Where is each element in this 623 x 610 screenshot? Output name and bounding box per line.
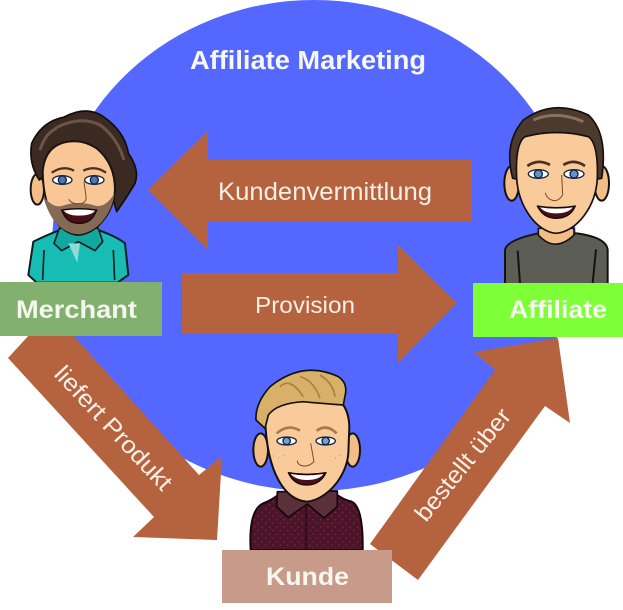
nose bbox=[69, 182, 86, 204]
face bbox=[516, 132, 597, 233]
label: Merchant bbox=[0, 282, 162, 336]
mouth bbox=[62, 209, 97, 223]
arrow: bestellt über: bestellt über bbox=[410, 403, 517, 527]
collar bbox=[54, 228, 103, 251]
beard bbox=[43, 193, 114, 234]
hair back bbox=[31, 111, 136, 212]
eyes bbox=[53, 176, 104, 184]
ears bbox=[504, 166, 609, 201]
mouth bbox=[288, 473, 326, 485]
mouth bbox=[537, 206, 575, 218]
title: Affiliate Marketing bbox=[190, 47, 426, 75]
label: Kunde: Kunde bbox=[266, 563, 349, 591]
arrow: Provision: Provision bbox=[255, 292, 355, 318]
collar bbox=[277, 491, 337, 518]
nose bbox=[545, 175, 563, 201]
freckles bbox=[273, 455, 340, 458]
ears bbox=[253, 433, 360, 467]
label: Affiliate: Affiliate bbox=[509, 296, 607, 324]
arrow: Provision bbox=[182, 245, 457, 363]
arrow: liefert Produkt: liefert Produkt bbox=[49, 361, 178, 496]
label: Affiliate bbox=[473, 283, 623, 337]
eyes bbox=[277, 437, 335, 445]
hair bbox=[510, 108, 603, 187]
arrow: bestellt über bbox=[370, 338, 570, 580]
eyebrows bbox=[527, 162, 585, 166]
nose bbox=[297, 443, 314, 466]
eyebrows bbox=[52, 168, 106, 173]
hair highlights bbox=[40, 121, 124, 160]
arrow: Kundenvermittlung: Kundenvermittlung bbox=[218, 178, 432, 206]
character: Kunde bbox=[250, 370, 363, 550]
neck bbox=[538, 228, 574, 244]
face bbox=[43, 141, 115, 235]
eyebrows bbox=[277, 428, 337, 433]
shirt bbox=[250, 493, 363, 550]
arrow: Kundenvermittlung bbox=[148, 131, 472, 250]
label: Merchant: Merchant bbox=[16, 296, 138, 324]
character: Affiliate bbox=[504, 108, 609, 284]
eyes bbox=[528, 170, 584, 178]
face bbox=[265, 390, 349, 502]
background circle bbox=[52, 0, 576, 491]
hair highlight bbox=[533, 115, 583, 122]
character: Merchant bbox=[28, 111, 136, 283]
hair bbox=[256, 370, 346, 428]
label: Kunde bbox=[222, 550, 392, 603]
shirt bbox=[28, 231, 128, 283]
arrow: liefert Produkt bbox=[8, 334, 222, 540]
sweater bbox=[505, 233, 608, 284]
ear bbox=[31, 174, 44, 205]
